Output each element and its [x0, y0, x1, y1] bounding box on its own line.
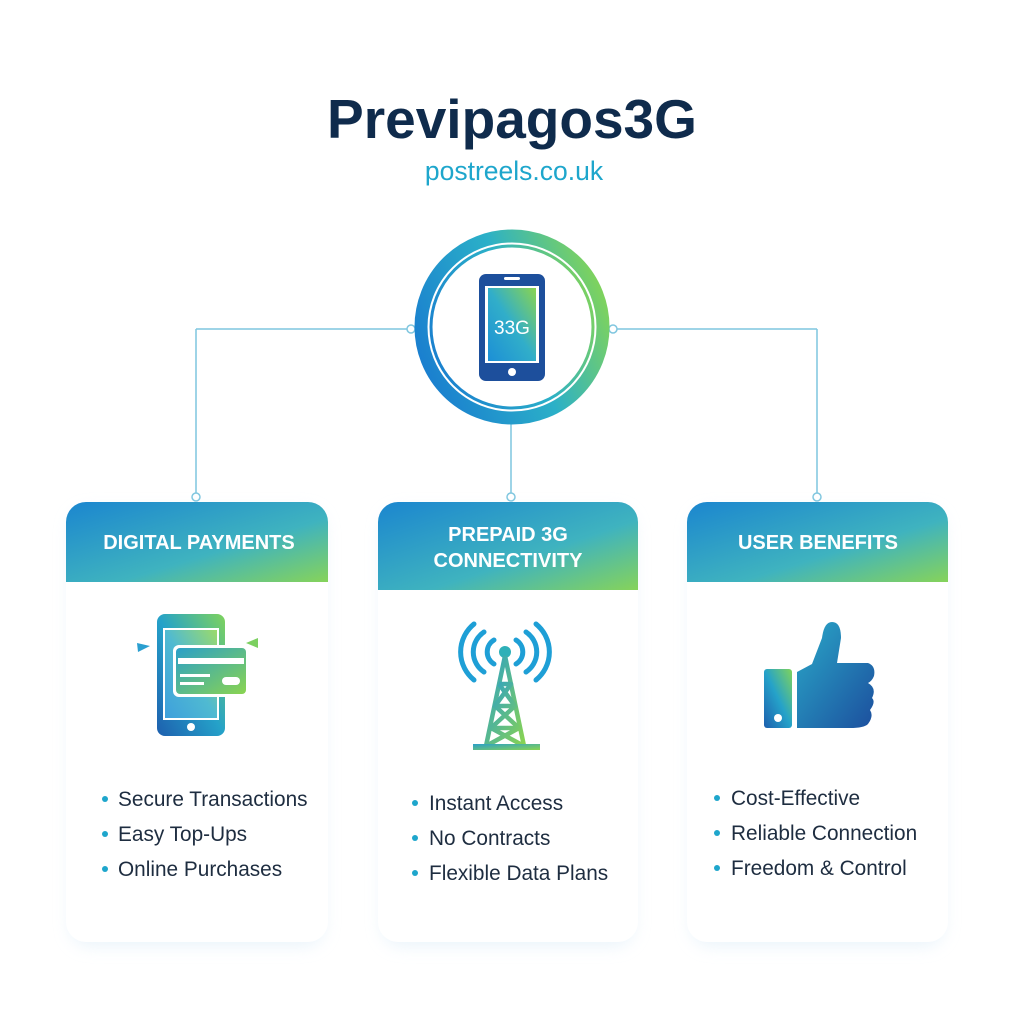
panel: prepaid 3g connectivity: CONNECTIVITY	[434, 550, 583, 572]
bullet list: Instant Access	[429, 792, 563, 815]
bullet list: Freedom & Control	[731, 857, 907, 880]
panel: digital payments: DIGITAL PAYMENTS	[103, 532, 295, 554]
bullet list: Easy Top-Ups	[118, 823, 247, 846]
bullet list: Cost-Effective	[731, 787, 860, 810]
bullet list	[412, 792, 608, 885]
bullet list: Flexible Data Plans	[429, 862, 608, 885]
bullet list: No Contracts	[429, 827, 550, 850]
icon: cell tower	[461, 624, 549, 750]
panel: user benefits	[687, 502, 948, 946]
central hub icon	[421, 236, 603, 418]
panel: prepaid 3g connectivity: PREPAID 3G	[448, 524, 568, 546]
subtitle: postreels.co.uk	[425, 156, 604, 186]
panel: digital payments	[66, 502, 328, 946]
panel: prepaid 3g connectivity	[378, 502, 638, 946]
bullet list: Online Purchases	[118, 858, 282, 881]
icon: phone with card	[137, 614, 258, 736]
panel: user benefits: USER BENEFITS	[738, 532, 898, 554]
central hub icon: 33G	[494, 318, 530, 339]
bullet list: Reliable Connection	[731, 822, 917, 845]
title: Previpagos3G	[327, 88, 697, 150]
icon: thumbs up	[764, 622, 874, 728]
bullet list: Secure Transactions	[118, 788, 308, 811]
bullet list	[102, 788, 308, 881]
bullet list	[714, 787, 917, 880]
connectors	[192, 325, 821, 501]
